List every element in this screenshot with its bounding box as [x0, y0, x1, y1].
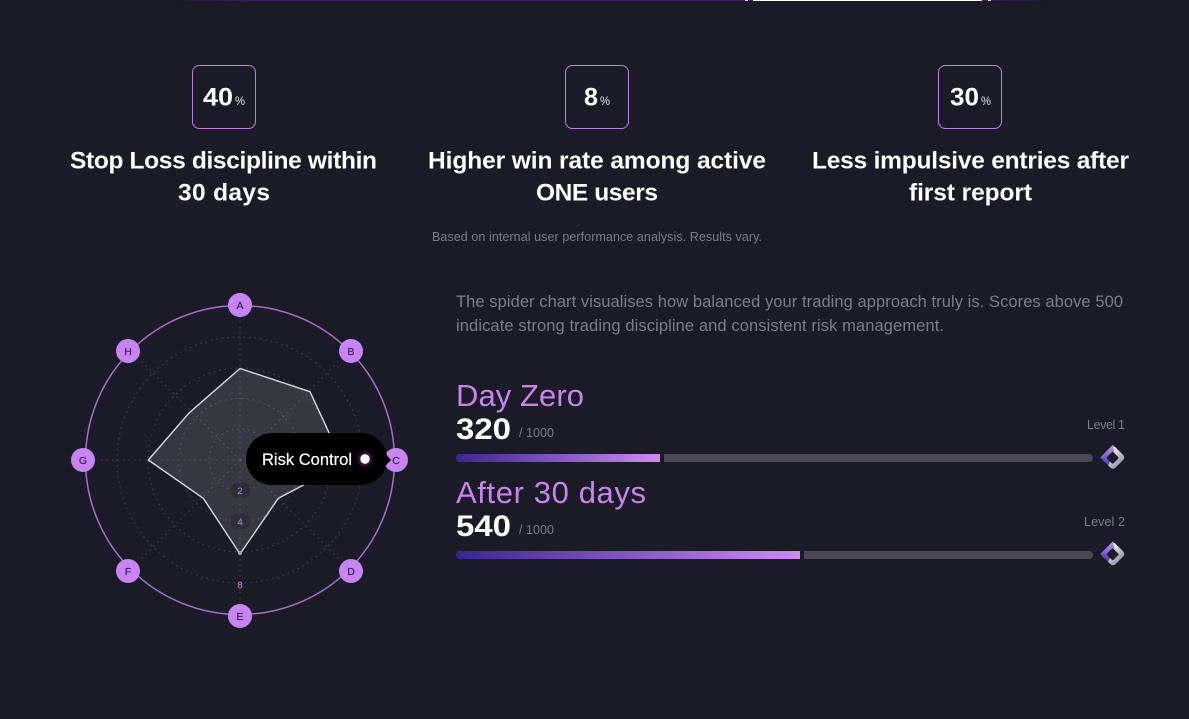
tooltip: risk control: Risk Control: [262, 451, 352, 469]
stat badge: 30%: [938, 66, 1002, 128]
stat badge: 30%: 30: [950, 84, 979, 112]
tooltip: risk control: [246, 433, 391, 485]
scale labels: 4: [237, 517, 243, 528]
stat heading: stop loss: 30 days: [178, 180, 270, 206]
stat: 30 percent: [812, 66, 1129, 206]
axis nodes: E: [236, 611, 244, 623]
stat badge: 40%: %: [235, 94, 245, 108]
radar chart: [71, 293, 408, 628]
score: 540: 540: [456, 510, 511, 543]
outer ring: [86, 306, 394, 614]
score maximum: / 1000: [519, 426, 554, 440]
axis nodes: F: [125, 566, 131, 578]
score row: day zero: [456, 378, 1126, 470]
axis nodes: C: [392, 455, 400, 467]
icon: level diamond: [1100, 541, 1126, 567]
scale labels: 8: [237, 580, 243, 592]
top progress strip: [165, 0, 1060, 1]
axis nodes: [71, 293, 408, 628]
stat badge: 40%: [192, 66, 256, 128]
level label: Level 1: [1087, 418, 1125, 432]
score polygon: [148, 368, 345, 554]
stat badge: 8%: %: [600, 94, 610, 108]
axis nodes: G: [79, 455, 87, 467]
description: indicate strong trading discipline and consistent risk management.: [456, 317, 944, 335]
stat heading: impulsive entries: Less impulsive entries after: [812, 148, 1129, 174]
stat heading: stop loss: Stop Loss discipline within: [70, 148, 377, 174]
axis nodes: H: [124, 346, 132, 358]
axis nodes: B: [347, 346, 355, 358]
stat badge: 30%: %: [981, 94, 991, 108]
axis nodes: D: [347, 566, 355, 578]
stat: 40 percent: [70, 66, 377, 206]
level label: Level 2: [1084, 515, 1125, 529]
scale labels: 2: [237, 486, 243, 497]
progress bar: [456, 551, 1093, 559]
score: 320: 320: [456, 413, 511, 446]
stat heading: win rate: Higher win rate among active: [428, 148, 766, 174]
stat badge: 40%: 40: [203, 84, 233, 112]
stat badge: 8%: 8: [584, 84, 598, 112]
stat badge: 8%: [566, 66, 628, 128]
stat heading: impulsive entries: first report: [909, 180, 1032, 206]
description: The spider chart visualises how balanced your trading approach truly is. Scores above 500: [456, 293, 1123, 311]
footnote: Based on internal user performance analysis. Results vary.: [432, 230, 762, 244]
score maximum: / 1000: [519, 523, 554, 537]
score row: after 30 days: [456, 475, 1126, 567]
label: day zero: Day Zero: [456, 378, 584, 413]
icon: level diamond: [1100, 445, 1126, 470]
stat: 8 percent: [428, 66, 766, 206]
label: after 30 days: After 30 days: [456, 475, 646, 510]
stat heading: win rate: ONE users: [536, 180, 658, 206]
axis nodes: A: [236, 300, 244, 312]
scale labels: [231, 483, 250, 592]
grid rings and spokes: [98, 318, 382, 602]
progress bar: [456, 454, 1093, 462]
